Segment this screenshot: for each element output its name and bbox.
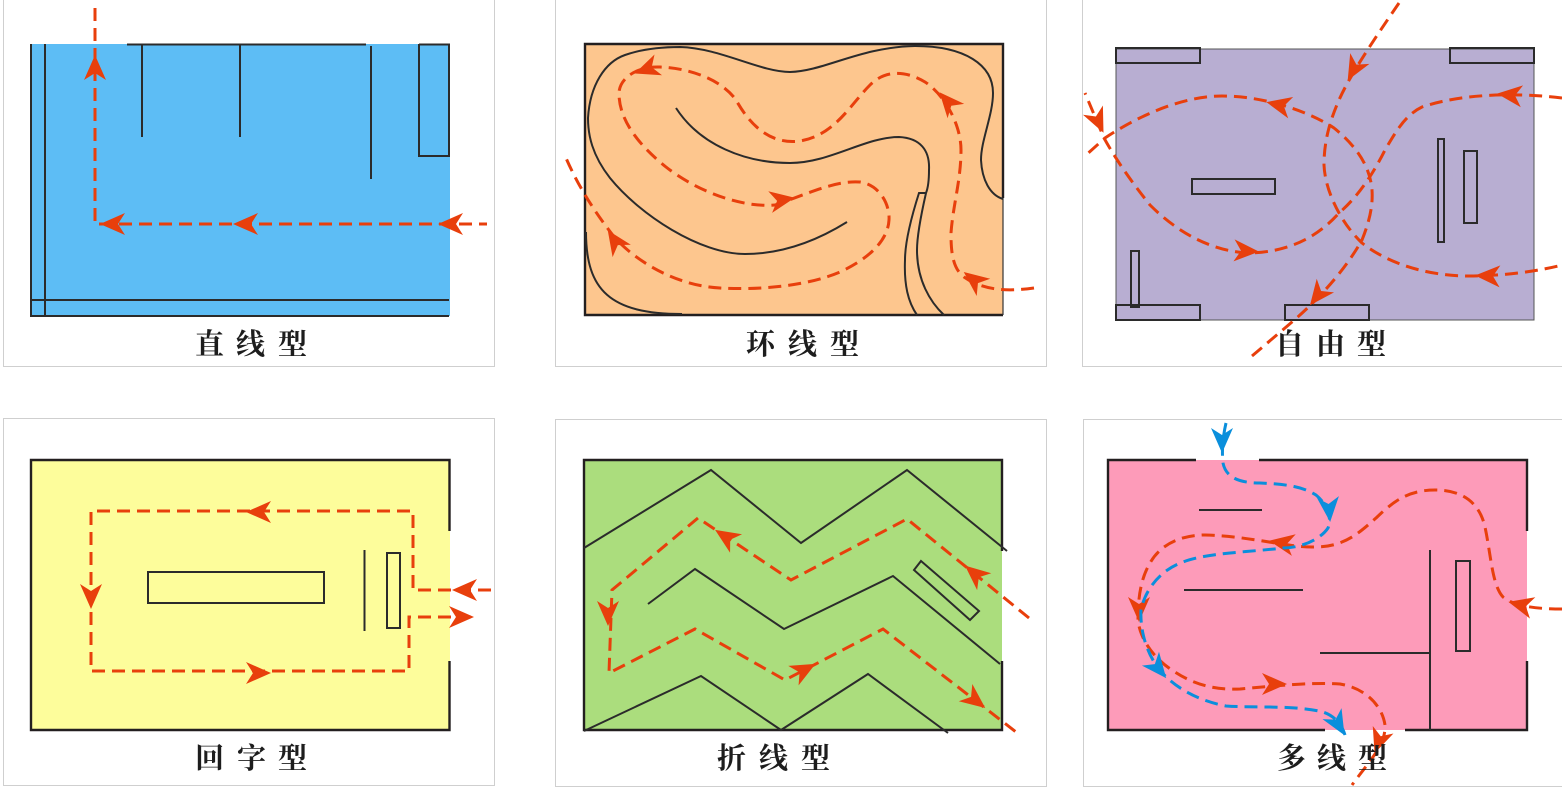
panel: hui-shaped type (4, 418, 494, 786)
route: zigzag (597, 518, 1029, 732)
floor plan: zigzag (584, 460, 1007, 733)
panel: straight-line type (4, 0, 494, 366)
route: multi-line orange (1128, 490, 1562, 785)
label: 折线型: 折线型 (717, 736, 830, 777)
route: multi-line blue (1141, 423, 1354, 741)
label: 直线型: 直线型 (195, 322, 307, 363)
panel: multi-line type (1084, 420, 1562, 786)
floor plan: multi-line (1108, 460, 1527, 730)
floor plan: loop (585, 44, 1003, 315)
label: 多线型: 多线型 (1277, 736, 1387, 777)
route: loop (566, 55, 1034, 296)
floor plan: hui-shaped (31, 460, 450, 730)
panel: loop type (556, 0, 1046, 366)
panel: zigzag type (556, 420, 1046, 786)
route: straight-line (84, 8, 487, 235)
label: 自由型: 自由型 (1275, 322, 1386, 363)
label: 环线型: 环线型 (746, 322, 859, 363)
floor plan: straight-line (31, 44, 450, 316)
route: free (1083, 3, 1562, 356)
floor plan: free (1116, 48, 1534, 320)
route: hui-shaped (80, 501, 491, 684)
panel: free type (1082, 0, 1562, 366)
label: 回字型: 回字型 (195, 736, 307, 777)
